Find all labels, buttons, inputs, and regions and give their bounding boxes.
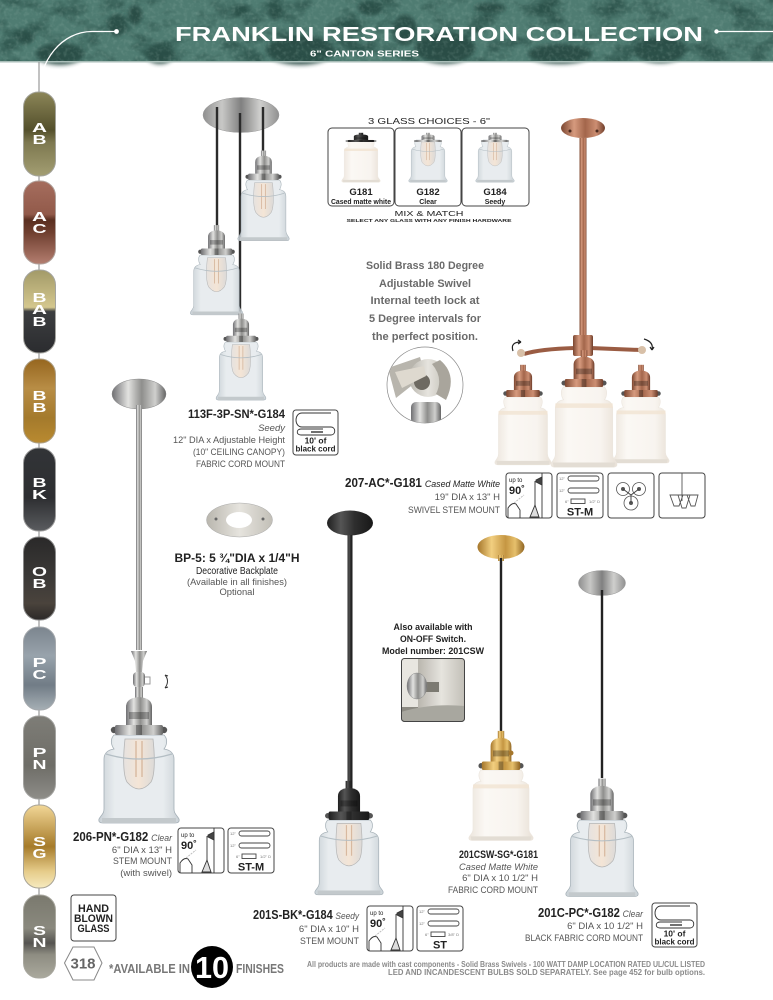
text: 201CSW: 6" DIA x 10 1/2" H (462, 873, 538, 884)
icon: stem lengths ST-M: 6" (236, 854, 240, 859)
finish OB (24, 537, 56, 620)
icon: stem lengths ST: 3/8" D (448, 932, 459, 937)
text: 207: 19" DIA x 13" H (435, 492, 500, 503)
text: 206: (with swivel) (120, 868, 172, 879)
icon: swivel 90 degrees: up to (181, 833, 195, 839)
mix and match note: MIX & MATCH (394, 211, 464, 218)
icon: 10ft cord: 10' of (664, 928, 686, 938)
swivel detail image (387, 347, 463, 424)
badge: hand blown glass: HAND (78, 903, 109, 915)
callout: on-off switch: Model number: 201CSW (382, 646, 484, 657)
text: 201S: STEM MOUNT (300, 936, 359, 947)
icon: stem lengths ST-M: 1/2" D (589, 499, 600, 504)
product: 201S stem pendant (315, 510, 383, 895)
text: 206 (73, 830, 173, 879)
icon: stem lengths ST-M (557, 473, 603, 518)
text: 207 (345, 476, 500, 516)
text: 113F: Seedy (258, 423, 286, 434)
finish BAB (24, 270, 56, 353)
icon: stem lengths ST-M: 1/2" D (260, 854, 271, 859)
footer notes: All products are made with cast components - Solid Brass Swivels - 100 WATT DAMP LOCATION RATED UL/CUL LISTED (307, 960, 705, 969)
icon: stem lengths ST: 6" (425, 932, 429, 937)
page number hexagon (64, 947, 102, 980)
text: 201C (525, 906, 644, 944)
finish SG: S (33, 834, 46, 849)
product: 207 chandelier (495, 118, 669, 467)
finish OB: O (32, 564, 47, 579)
text: 201S: 201S-BK*-G184 Seedy (253, 908, 360, 922)
text: 113F: 113F-3P-SN*-G184 (188, 407, 285, 421)
title: FRANKLIN RESTORATION COLLECTION (175, 24, 703, 46)
icon: swivel 90 degrees: up to (370, 911, 384, 917)
text: 201CSW: FABRIC CORD MOUNT (448, 885, 538, 896)
page number hexagon: 318 (70, 956, 96, 972)
finish AB: B (32, 132, 46, 147)
text: 113F: FABRIC CORD MOUNT (196, 459, 285, 470)
finish AC: A (32, 209, 48, 224)
finish BK: K (32, 487, 48, 502)
text: BP-5 backplate: Optional (220, 587, 254, 598)
product: 201CSW pendant (469, 535, 533, 840)
available finishes line (109, 946, 284, 988)
finish AC: C (32, 221, 47, 236)
icon: stem lengths ST-M: ST-M (567, 506, 593, 518)
icon: swivel 90 degrees: 90˚ (181, 840, 197, 852)
available finishes line: FINISHES (236, 961, 284, 976)
text: BP-5 backplate: BP-5: 5 ¾"DIA x 1/4"H (174, 551, 300, 565)
mix and match note (346, 211, 512, 223)
badge: hand blown glass: BLOWN (74, 913, 113, 925)
icon: swivel arrow (165, 675, 168, 688)
finish BK (24, 448, 56, 531)
available finishes line: *AVAILABLE IN (109, 961, 190, 976)
icon: stem lengths ST: ST (433, 940, 447, 952)
text: 113F (173, 407, 286, 470)
finish PC (24, 627, 56, 710)
text: BP-5 backplate (174, 551, 300, 598)
glass choices heading: 3 GLASS CHOICES - 6" (368, 116, 490, 126)
finish SN (24, 895, 56, 978)
text: BP-5 backplate: (Available in all finishes) (187, 577, 287, 588)
product: 206 stem mount (99, 379, 179, 823)
icon: swivel 90 degrees (178, 828, 224, 873)
finish SN: N (32, 935, 46, 950)
card: G181: Cased matte white (331, 199, 391, 206)
finish PN: N (32, 757, 46, 772)
icon: rotate arrows (512, 339, 654, 351)
card: G184 (462, 128, 529, 206)
icon: elevation view (659, 473, 705, 518)
text: 206: 206-PN*-G182 Clear (73, 830, 173, 844)
text: 207: 207-AC*-G181 Cased Matte White (345, 476, 500, 490)
badge: hand blown glass: GLASS (78, 923, 110, 935)
icon: 10ft cord (652, 903, 697, 947)
card: G182: G182 (416, 187, 440, 198)
text: 201CSW (448, 849, 538, 896)
swivel description: Solid Brass 180 Degree (366, 260, 484, 272)
icon: 10ft cord: black cord (296, 444, 336, 454)
finish SG: G (32, 846, 46, 861)
text: 201CSW: 201CSW-SG*-G181 (459, 849, 538, 861)
icon: swivel 90 degrees (367, 906, 413, 951)
finish PN: P (32, 745, 47, 760)
icon: swivel 90 degrees: 90˚ (370, 918, 386, 930)
swivel description: the perfect position. (372, 331, 478, 343)
icon: swivel 90 degrees (506, 473, 552, 518)
card: G184: G184 (483, 187, 507, 198)
callout: on-off switch: Also available with (394, 622, 473, 633)
card: G181 (328, 128, 394, 206)
badge: hand blown glass (71, 895, 116, 941)
swivel description: Adjustable Swivel (379, 278, 471, 290)
finish BB: B (32, 388, 46, 403)
swivel description: 5 Degree intervals for (369, 313, 482, 325)
text: 206: 6" DIA x 13" H (112, 845, 172, 856)
icon: stem lengths ST-M: 12" (559, 488, 565, 493)
footer notes: LED AND INCANDESCENT BULBS SOLD SEPARATELY. See page 452 for bulb options. (388, 967, 705, 977)
icon: stem lengths ST (417, 906, 463, 952)
icon: 10ft cord (293, 410, 338, 455)
subtitle: 6" CANTON SERIES (310, 48, 419, 58)
icon: top view layout (608, 473, 654, 518)
icon: stem lengths ST: 12" (419, 921, 425, 926)
finish BAB: B (32, 290, 46, 305)
icon: stem lengths ST-M (228, 828, 274, 874)
icon: swivel 90 degrees: up to (509, 478, 523, 484)
finish SN: S (33, 923, 46, 938)
finish PC: P (32, 655, 47, 670)
finish BB: B (32, 400, 46, 415)
finish BK: B (32, 475, 46, 490)
finish AB (24, 92, 56, 176)
text: 201C: 6" DIA x 10 1/2" H (567, 921, 643, 932)
text: 113F: 12" DIA x Adjustable Height (173, 435, 285, 446)
finish BAB: A (32, 302, 48, 317)
icon: stem lengths ST: 12" (419, 909, 425, 914)
mix and match note: SELECT ANY GLASS WITH ANY FINISH HARDWARE (346, 218, 512, 223)
finish SG (24, 805, 56, 888)
icon: swivel 90 degrees: 90˚ (509, 485, 525, 497)
text: 207: SWIVEL STEM MOUNT (408, 505, 500, 516)
icon: stem lengths ST-M: ST-M (238, 862, 264, 874)
text: 201S (253, 908, 360, 947)
text: 201S: 6" DIA x 10" H (299, 924, 359, 935)
icon: stem lengths ST-M: 12" (230, 843, 236, 848)
icon: stem lengths ST-M: 12" (230, 831, 236, 836)
finish BAB: B (32, 314, 46, 329)
swivel description: Internal teeth lock at (370, 295, 480, 307)
product: 201C pendant (566, 570, 638, 897)
card: G184: Seedy (485, 199, 505, 206)
card: G182: Clear (419, 199, 437, 206)
text: 201CSW: Cased Matte White (459, 862, 538, 873)
finish AB: A (32, 120, 48, 135)
icon: 10ft cord: black cord (654, 936, 694, 946)
finish OB: B (32, 576, 46, 591)
connector line right (714, 29, 773, 34)
callout: on-off switch: ON-OFF Switch. (400, 634, 466, 645)
finish selector column (24, 92, 56, 978)
card: G182 (395, 128, 461, 206)
header banner (0, 0, 773, 65)
icon: 10ft cord: 10' of (305, 436, 327, 446)
icon: stem lengths ST-M: 6" (565, 499, 569, 504)
backplate image (206, 503, 272, 537)
connector line left (39, 29, 119, 95)
finish PC: C (32, 667, 47, 682)
icon: stem lengths ST-M: 12" (559, 476, 565, 481)
card: G181: G181 (349, 187, 373, 198)
text: 201C: BLACK FABRIC CORD MOUNT (525, 933, 643, 944)
text: 113F: (10" CEILING CANOPY) (193, 447, 285, 458)
footer notes (307, 960, 705, 977)
finish PN (24, 716, 56, 799)
swivel description (366, 260, 484, 343)
glass choices panel (328, 116, 529, 223)
finish AC (24, 181, 56, 264)
text: 206: STEM MOUNT (113, 856, 172, 867)
available finishes line: 10 (195, 950, 229, 985)
finish BB (24, 359, 56, 443)
callout: on-off switch (382, 622, 484, 722)
text: 201C: 201C-PC*-G182 Clear (538, 906, 644, 920)
product: 3-light cluster pendant 113F (190, 98, 289, 400)
text: BP-5 backplate: Decorative Backplate (196, 566, 278, 577)
